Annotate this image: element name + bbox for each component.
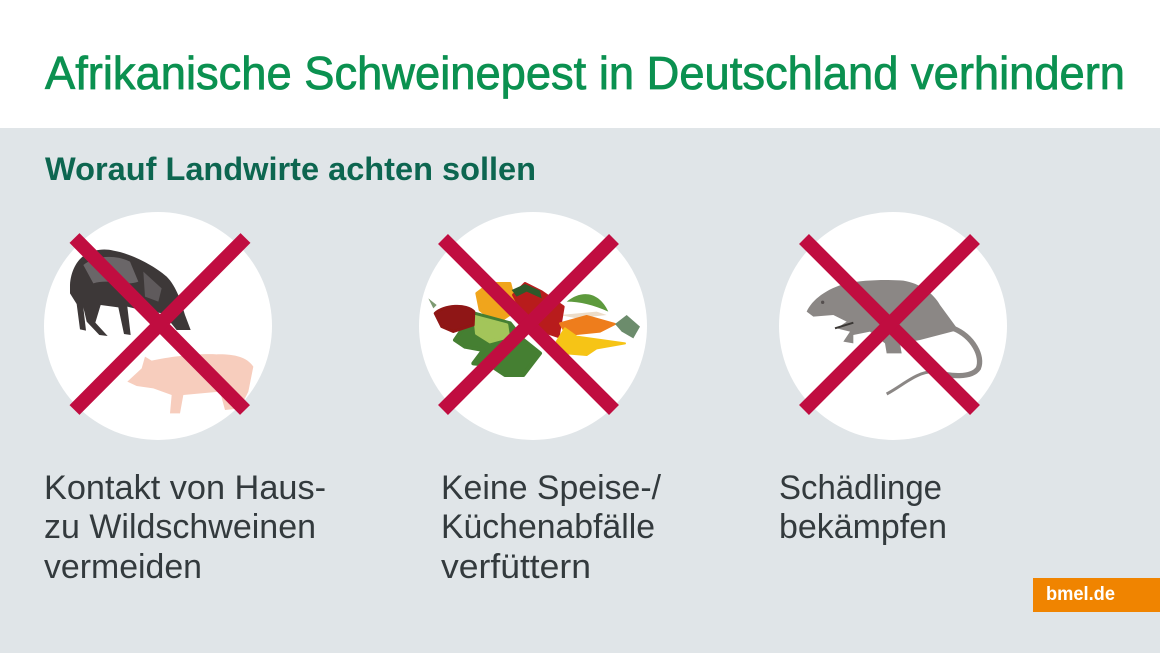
label 1: vermeiden — [44, 548, 202, 586]
icon circle 2 — [419, 212, 647, 440]
label 1: zu Wildschweinen — [44, 508, 316, 546]
label 1: Kontakt von Haus- — [44, 469, 326, 507]
icon: red cross 2 — [443, 239, 614, 410]
icon: domestic pig — [127, 354, 253, 413]
icon circle 1 — [44, 212, 272, 440]
label 2: verfüttern — [441, 548, 591, 586]
badge: bmel.de: bmel.de — [1046, 584, 1115, 605]
icon: red cross 3 — [804, 239, 975, 410]
panel: pest control — [779, 212, 1007, 546]
icon: red cross 1 — [74, 238, 246, 410]
label 3: Schädlinge — [779, 469, 942, 507]
badge: bmel.de — [1033, 578, 1160, 612]
label 2: Küchenabfälle — [441, 508, 655, 546]
subheading: Worauf Landwirte achten sollen — [45, 151, 536, 187]
panel: no food waste — [419, 212, 670, 586]
icon: rat — [807, 280, 980, 394]
icon circle 3 — [779, 212, 1007, 440]
icon: wild boar — [70, 249, 191, 336]
icon: vegetables — [428, 283, 640, 375]
panel: contact between domestic pigs and wild boar — [44, 212, 335, 586]
label 3: bekämpfen — [779, 508, 947, 546]
title: Afrikanische Schweinepest in Deutschland verhindern — [45, 47, 1125, 99]
label 2: Keine Speise-/ — [441, 469, 662, 507]
